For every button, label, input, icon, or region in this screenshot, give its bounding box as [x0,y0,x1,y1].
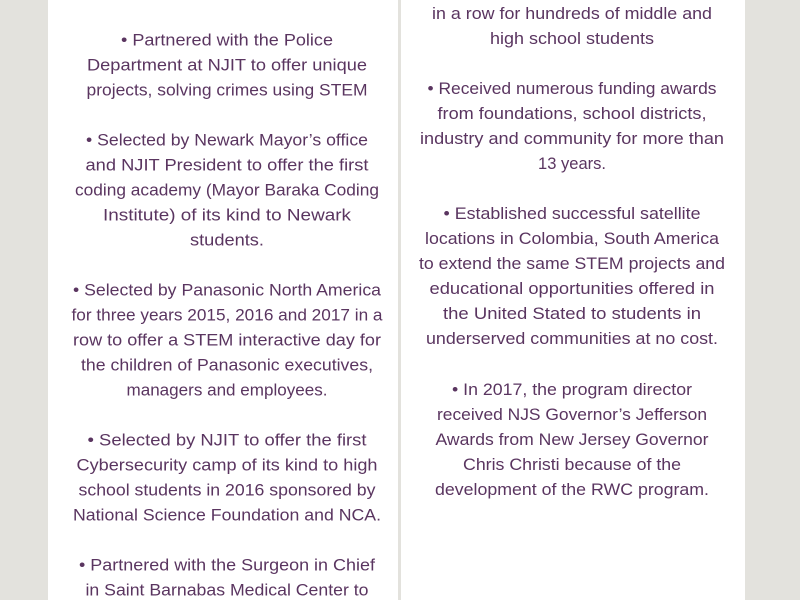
text block: cybersecurity camp [73,432,381,524]
text block: Panasonic interactive day: row to offer a STEM interactive day for [73,332,382,350]
text block: funding awards: from foundations, school districts, [438,105,706,123]
text block: satellite locations: to extend the same STEM projects and [419,255,725,273]
text block: cybersecurity camp: National Science Foundation and NCA. [73,506,381,524]
text block: Panasonic interactive day: managers and employees. [126,382,328,400]
text block: Jefferson Awards: received NJS Governor’s Jefferson [437,406,707,424]
text block: funding awards [420,80,724,173]
text block: middle and high school students: high school students [490,30,654,48]
text block: coding academy: • Selected by Newark Mayor’s office [86,132,368,150]
text block: Saint Barnabas partnership [79,556,375,600]
text block: satellite locations: the United Stated to students in [443,305,701,323]
text block: cybersecurity camp: school students in 2016 sponsored by [78,482,376,500]
text block: Panasonic interactive day: for three years 2015, 2016 and 2017 in a [72,306,383,324]
text block: satellite locations: educational opportunities offered in [430,280,714,298]
text block: funding awards: 13 years. [538,155,606,173]
text block: Jefferson Awards: Chris Christi because of the [463,456,681,474]
text block: Jefferson Awards: Awards from New Jersey Governor [436,431,709,449]
text block: police partnership: projects, solving crimes using STEM [86,82,368,100]
text block: coding academy: and NJIT President to offer the first [86,156,369,174]
panel: left column [48,0,398,600]
text block: Jefferson Awards: • In 2017, the program director [452,381,693,399]
text block: Saint Barnabas partnership: • Partnered with the Surgeon in Chief [79,556,375,574]
text block: satellite locations: underserved communities at no cost. [426,330,718,348]
text block: Panasonic interactive day: • Selected by Panasonic North America [73,282,382,300]
text block: police partnership: Department at NJIT to offer unique [87,56,367,74]
text block: Panasonic interactive day: the children of Panasonic executives, [81,356,373,374]
text block: Jefferson Awards: development of the RWC program. [435,481,709,499]
text block: funding awards: industry and community for more than [420,130,724,148]
text block: coding academy: students. [190,232,264,250]
text block: satellite locations: • Established successful satellite [444,205,700,223]
text block: satellite locations [419,205,725,348]
text block: middle and high school students [432,5,712,48]
text block: Saint Barnabas partnership: in Saint Barnabas Medical Center to [86,582,368,600]
text block: cybersecurity camp: Cybersecurity camp of its kind to high [76,456,378,474]
text block: funding awards: • Received numerous funding awards [428,80,716,98]
text block: police partnership [86,32,368,100]
text block: Panasonic interactive day [72,282,383,400]
text block: police partnership: • Partnered with the Police [121,32,333,50]
text block: Jefferson Awards [435,381,709,499]
text block: middle and high school students: in a row for hundreds of middle and [432,5,712,23]
text block: coding academy: coding academy (Mayor Baraka Coding [75,182,379,200]
panel: right column [401,0,745,600]
text block: cybersecurity camp: • Selected by NJIT to offer the first [88,432,367,450]
text block: coding academy: Institute) of its kind to Newark [103,206,352,224]
text block: coding academy [75,132,379,250]
text block: satellite locations: locations in Colombia, South America [425,230,720,248]
